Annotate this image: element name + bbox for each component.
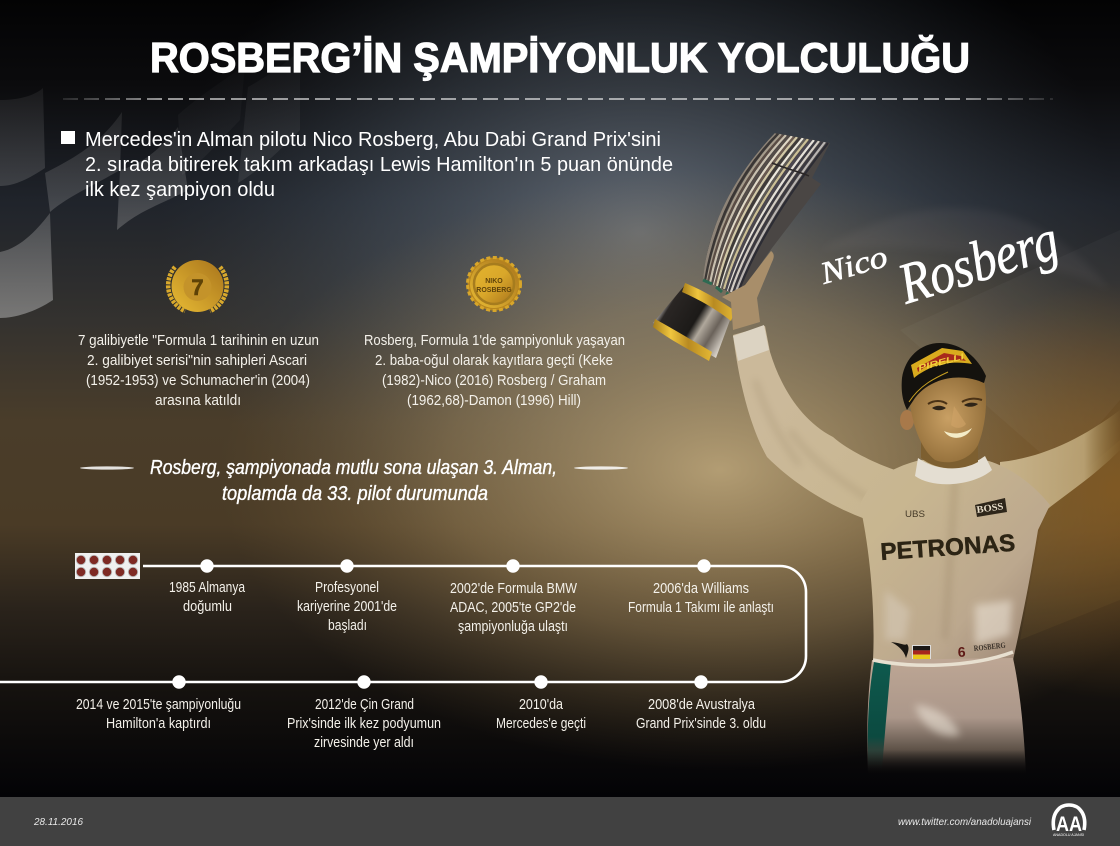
legs — [867, 658, 1026, 775]
icon: Niko Rosberg seal — [468, 258, 520, 310]
timeline: 2002: ADAC, 2005'te GP2'de — [450, 599, 576, 616]
photo: Nico Rosberg with trophy — [653, 125, 1120, 775]
timeline: 2006: Formula 1 Takımı ile anlaştı — [628, 599, 774, 616]
timeline: 2001: Profesyonel — [315, 579, 379, 596]
cuff — [733, 325, 769, 361]
arm folds — [755, 380, 870, 500]
text: father and son — [364, 332, 625, 409]
highlighted statement — [80, 457, 628, 505]
timeline track — [0, 559, 806, 689]
text: seven wins — [78, 332, 319, 409]
suit logo: Boss — [975, 498, 1007, 517]
timeline: 2014 — [76, 696, 241, 732]
signature: Nico Rosberg: Rosberg — [890, 207, 1066, 317]
logo: Anadolu Ajansı — [1053, 805, 1085, 837]
timeline: 2001 — [297, 579, 397, 634]
suit logo: number and name: ROSBERG — [973, 641, 1006, 653]
timeline: 1985: doğumlu — [183, 598, 232, 615]
icon: laurel medal 7: 7 — [191, 275, 204, 300]
suit logo: Boss: BOSS — [976, 501, 1005, 516]
waist band — [873, 652, 1013, 665]
suit logo: UBS: UBS — [905, 509, 925, 519]
icon: Niko Rosberg seal: NIKO — [485, 278, 503, 285]
trophy — [653, 125, 840, 361]
highlighted statement: Rosberg, şampiyonada mutlu sona ulaşan 3. Alman, — [150, 457, 557, 479]
raised left arm — [733, 326, 930, 520]
cap — [902, 343, 986, 410]
icon: Niko Rosberg seal: ROSBERG — [476, 287, 512, 294]
timeline: 2010: 2010'da — [519, 696, 564, 713]
timeline: 2001: başladı — [328, 617, 367, 634]
text: father and son: 2. baba-oğul olarak kayıtlara geçti (Keke — [375, 352, 613, 369]
ear — [900, 410, 914, 430]
logo: Anadolu Ajansı: ANADOLU AJANSI — [1053, 833, 1084, 837]
text: father and son: (1982)-Nico (2016) Rosberg / Graham — [382, 372, 606, 389]
timeline: 2012 — [287, 696, 441, 751]
suit logo: number and name — [957, 641, 1006, 660]
text: seven wins: 2. galibiyet serisi"nin sahipleri Ascari — [87, 352, 307, 369]
icon: starting lights — [75, 553, 140, 579]
timeline: 1985 — [169, 579, 246, 615]
timeline: 2010 — [496, 696, 586, 732]
timeline: 2002: şampiyonluğa ulaştı — [458, 618, 568, 635]
German flag — [912, 645, 931, 659]
cap: PIRELLI — [917, 351, 966, 373]
title divider — [63, 98, 1053, 100]
timeline: 2008: 2008'de Avustralya — [648, 696, 756, 713]
text: seven wins: (1952-1953) ve Schumacher'in (2004) — [86, 372, 310, 389]
timeline: 2010: Mercedes'e geçti — [496, 715, 586, 732]
intro text block — [61, 129, 673, 201]
text: father and son: (1962,68)-Damon (1996) Hill) — [407, 392, 581, 409]
date: 28.11.2016 — [33, 817, 83, 828]
logo: Anadolu Ajansı: AA — [1056, 813, 1082, 836]
intro paragraph — [85, 129, 673, 201]
timeline: 2008: Grand Prix'sinde 3. oldu — [636, 715, 766, 732]
face — [910, 374, 986, 462]
text: father and son: Rosberg, Formula 1'de şampiyonluk yaşayan — [364, 332, 625, 349]
timeline: 2014: Hamilton'a kaptırdı — [106, 715, 211, 732]
timeline: 2012: 2012'de Çin Grand — [315, 696, 414, 713]
timeline: 2012: Prix'sinde ilk kez podyumun — [287, 715, 441, 732]
hand — [722, 251, 774, 330]
right arm — [1000, 410, 1120, 520]
text: seven wins: arasına katıldı — [155, 392, 241, 409]
bullet square — [61, 131, 75, 144]
facial features — [928, 399, 982, 438]
neck — [921, 440, 978, 468]
torso — [860, 460, 1050, 660]
suit logo: number and name: 6 — [957, 644, 966, 660]
collar — [915, 456, 992, 484]
intro paragraph: ilk kez şampiyon oldu — [85, 179, 275, 201]
timeline: 2008 — [636, 696, 766, 732]
timeline: 2002: 2002'de Formula BMW — [450, 580, 578, 597]
timeline: 2001: kariyerine 2001'de — [297, 598, 397, 615]
timeline: 2014: 2014 ve 2015'te şampiyonluğu — [76, 696, 241, 713]
icon: laurel medal 7 — [168, 260, 227, 312]
checkered flag — [0, 50, 300, 318]
timeline: 2012: zirvesinde yer aldı — [314, 734, 414, 751]
footer bar — [0, 797, 1120, 846]
text: seven wins: 7 galibiyetle "Formula 1 tarihinin en uzun — [78, 332, 319, 349]
suit highlights — [885, 480, 1012, 736]
intro paragraph: 2. sırada bitirerek takım arkadaşı Lewis Hamilton'ın 5 puan önünde — [85, 154, 673, 176]
suit logo: Petronas: PETRONAS — [880, 530, 1016, 566]
timeline: 1985: 1985 Almanya — [169, 579, 246, 596]
suit logo: Puma — [891, 642, 909, 658]
timeline: 2006 — [628, 580, 774, 616]
title: ROSBERG’İN ŞAMPİYONLUK YOLCULUĞU — [150, 34, 970, 81]
timeline: 2006: 2006'da Williams — [653, 580, 749, 597]
signature: Nico Rosberg — [815, 207, 1066, 317]
highlighted statement: toplamda da 33. pilot durumunda — [222, 483, 488, 505]
twitter address: www.twitter.com/anadoluajansi — [898, 816, 1032, 828]
green side stripe — [868, 662, 891, 770]
signature: Nico Rosberg: Nico — [815, 238, 891, 291]
intro paragraph: Mercedes'in Alman pilotu Nico Rosberg, Abu Dabi Grand Prix'sini — [85, 129, 661, 151]
timeline: 2002 — [450, 580, 578, 635]
